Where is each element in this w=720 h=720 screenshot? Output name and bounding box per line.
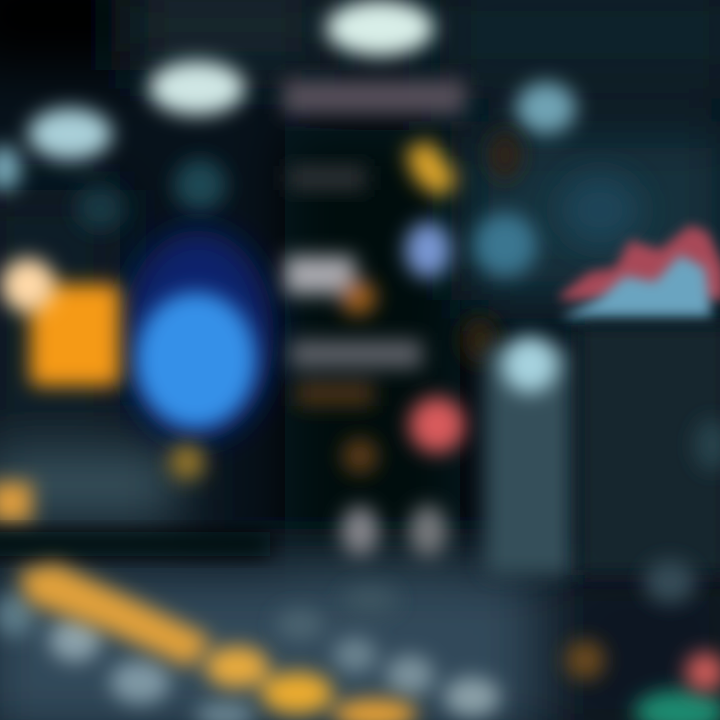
icon: periwinkle circle bbox=[405, 222, 451, 278]
left platform bbox=[0, 482, 270, 556]
icon: amber dot bbox=[342, 438, 378, 474]
right panel bbox=[485, 325, 720, 575]
icon: red circle bbox=[409, 397, 465, 453]
ceiling lights bbox=[0, 0, 576, 230]
orange square bbox=[1, 258, 120, 386]
text block: middle bbox=[285, 256, 376, 315]
blue orb bbox=[122, 230, 274, 480]
bottom right items bbox=[565, 560, 720, 720]
title block bbox=[283, 80, 465, 114]
subtitle block bbox=[288, 166, 366, 190]
icon: dim amber bbox=[488, 130, 522, 180]
icon: dim amber square bbox=[462, 316, 498, 364]
icon: yellow badge bbox=[405, 140, 458, 198]
keyboard keys bbox=[0, 586, 500, 720]
text block: lower bbox=[290, 340, 422, 406]
icon: teal circle bbox=[473, 213, 537, 277]
icons: gray pair bbox=[341, 505, 447, 557]
area chart bbox=[560, 175, 720, 318]
yellow keys bbox=[18, 563, 417, 720]
